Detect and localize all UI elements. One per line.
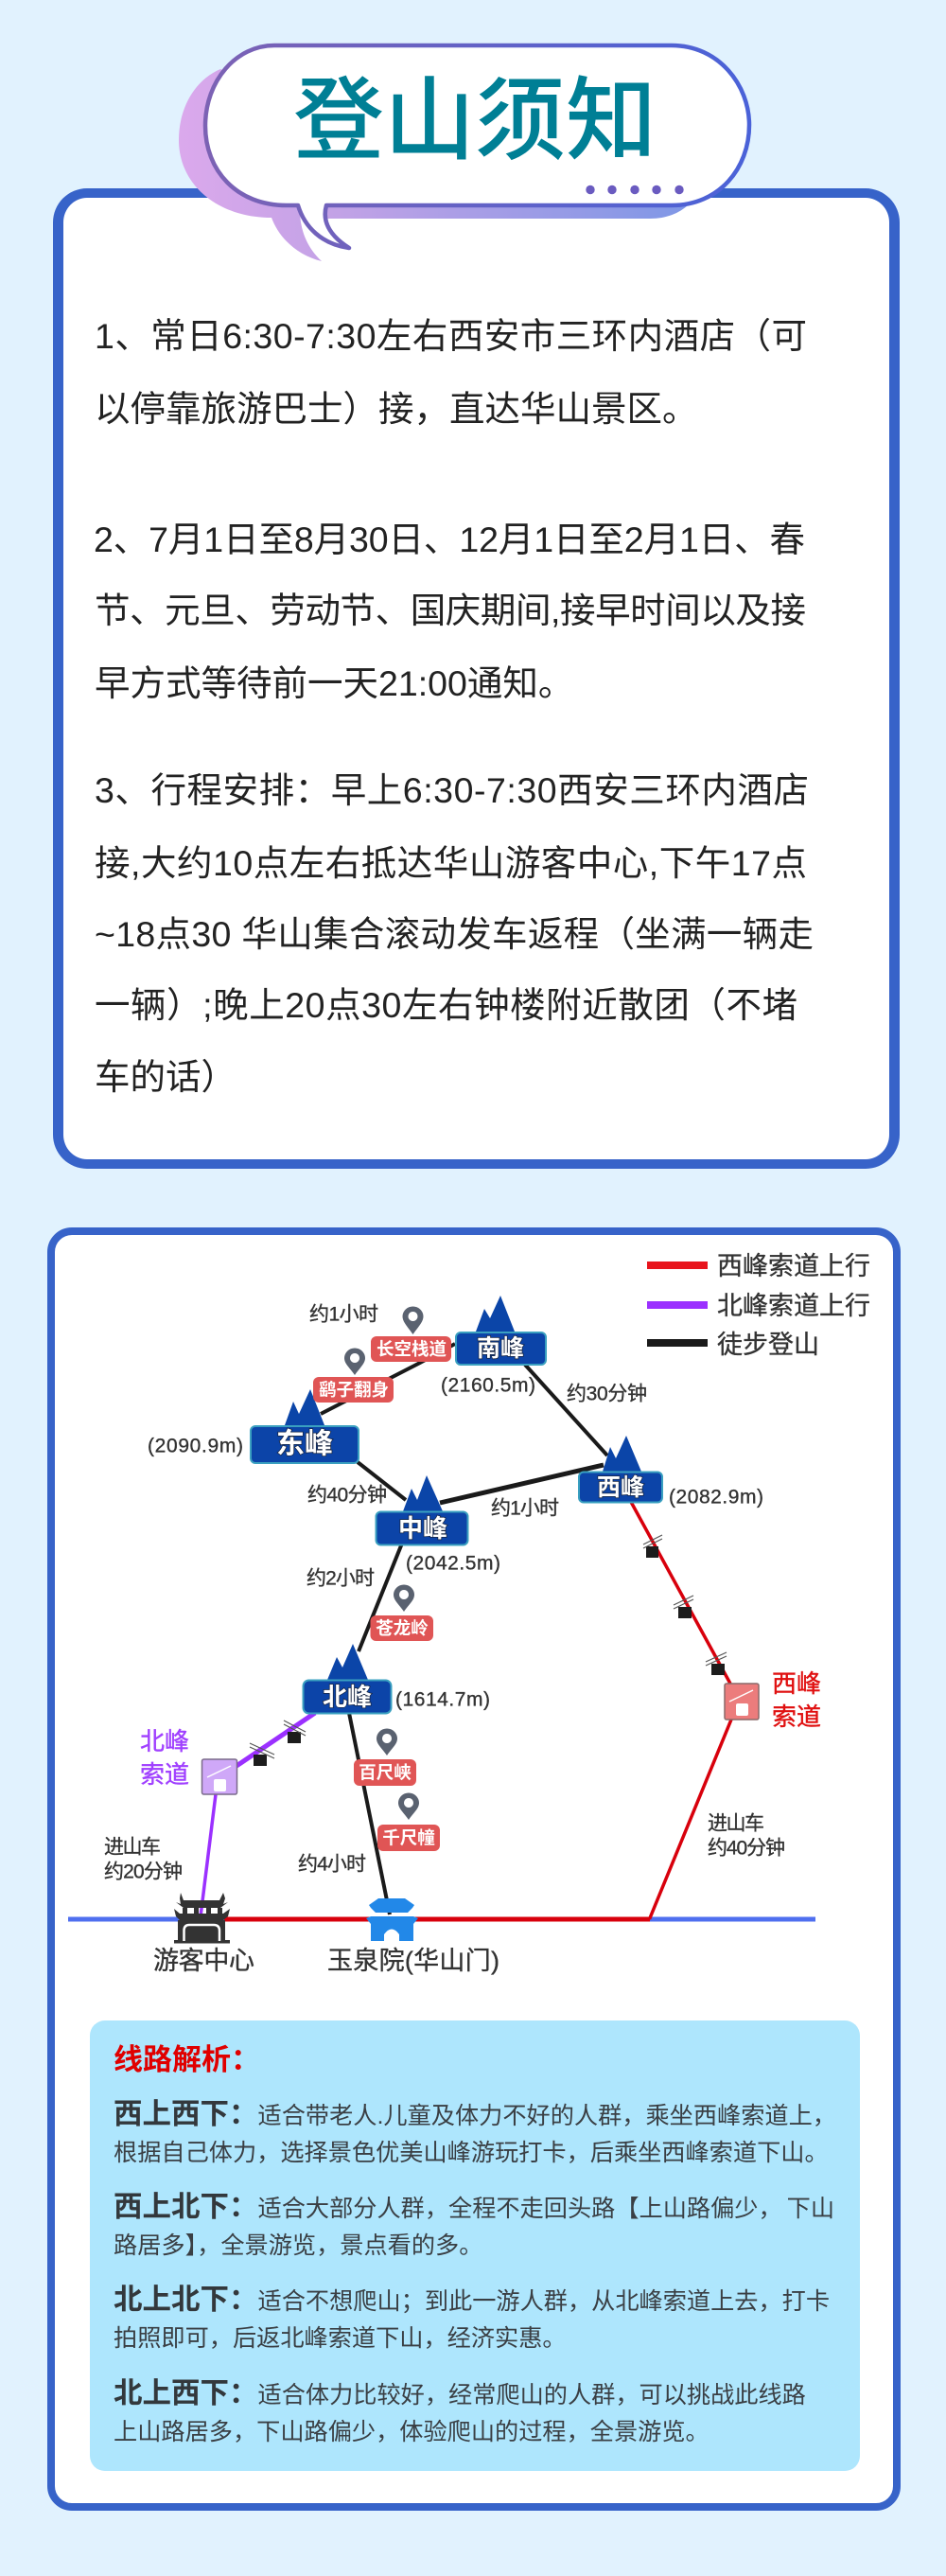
notes text: 2、7月1日至8月30日、12月1日至2月1日、春 — [94, 520, 805, 559]
panel: route analysis — [90, 2020, 860, 2471]
peak: 中峰: 中峰 — [398, 1514, 447, 1543]
labels: times and altitudes: 约20分钟 — [104, 1861, 183, 1883]
peak: 北峰: 北峰 — [323, 1683, 372, 1711]
legend: 西峰索道上行 — [717, 1252, 870, 1280]
route map diagram — [68, 1252, 870, 1975]
notes text: ~18点30 华山集合滚动发车返程（坐满一辆走 — [95, 914, 814, 954]
route analysis text: 路居多】，全景游览，景点看的多。 — [114, 2232, 482, 2259]
title speech bubble — [179, 44, 751, 261]
scenic spot tags: 长空栈道 — [377, 1339, 447, 1359]
base road line — [68, 1917, 815, 1921]
label: north cableway — [140, 1727, 189, 1789]
labels: times and altitudes: (2090.9m) — [148, 1435, 243, 1457]
peak: 东峰 — [251, 1389, 359, 1463]
labels: times and altitudes: 约40分钟 — [307, 1484, 387, 1507]
labels: times and altitudes: 约2小时 — [307, 1567, 375, 1590]
labels: times and altitudes: 约40分钟 — [708, 1838, 785, 1859]
scenic spot tags: 鹞子翻身 — [319, 1380, 389, 1400]
route analysis text: 根据自己体力，选择景色优美山峰游玩打卡，后乘坐西峰索道下山。 — [114, 2140, 829, 2166]
label: locations: 玉泉院(华山门) — [327, 1947, 499, 1975]
labels: times and altitudes: 约1小时 — [309, 1304, 378, 1325]
panel: notes — [53, 188, 900, 1169]
notes text: 车的话） — [95, 1057, 236, 1097]
route analysis text: 西上北下：适合大部分人群，全程不走回头路【上山路偏少，下山 — [114, 2191, 834, 2223]
route analysis text: 西上西下：适合带老人.儿童及体力不好的人群，乘坐西峰索道上， — [114, 2098, 836, 2130]
labels: times and altitudes: 约4小时 — [298, 1853, 366, 1876]
cable cars — [250, 1535, 727, 1766]
peak: 东峰: 东峰 — [276, 1429, 333, 1459]
label: north cableway: 索道 — [140, 1760, 189, 1789]
scenic spot tags: 百尺峡 — [359, 1762, 412, 1783]
peak: 西峰 — [579, 1436, 662, 1503]
cableway station: north — [202, 1759, 236, 1794]
labels: times and altitudes: (1614.7m) — [395, 1688, 490, 1711]
scenic spot tags: 千尺幢 — [382, 1828, 435, 1847]
route analysis text — [114, 2098, 836, 2445]
notes text: 1、常日6:30-7:30左右西安市三环内酒店（可 — [95, 316, 807, 356]
label: west cableway: 西峰 — [772, 1669, 821, 1698]
labels: times and altitudes: 进山车 — [104, 1836, 161, 1859]
route analysis heading: 线路解析： — [114, 2043, 260, 2076]
route analysis text: 拍照即可，后返北峰索道下山，经济实惠。 — [114, 2325, 567, 2352]
labels: times and altitudes: (2082.9m) — [669, 1486, 763, 1509]
notes text: 接,大约10点左右抵达华山游客中心,下午17点 — [95, 843, 807, 883]
legend: 徒步登山 — [717, 1331, 819, 1359]
notes text: 一辆）;晚上20点30左右钟楼附近散团（不堵 — [95, 985, 797, 1025]
route analysis text: 北上西下：适合体力比较好，经常爬山的人群，可以挑战此线路 — [114, 2377, 806, 2409]
labels: times and altitudes: 约1小时 — [491, 1497, 559, 1520]
legend: 北峰索道上行 — [717, 1292, 870, 1320]
map pins — [344, 1306, 424, 1820]
labels: times and altitudes — [104, 1304, 785, 1883]
peak: 中峰 — [377, 1475, 467, 1544]
notes text: 早方式等待前一天21:00通知。 — [95, 663, 573, 703]
labels: times and altitudes: (2160.5m) — [441, 1374, 535, 1397]
label: west cableway — [772, 1669, 821, 1731]
notes text: 3、行程安排：早上6:30-7:30西安三环内酒店 — [95, 770, 809, 810]
label: north cableway: 北峰 — [140, 1727, 189, 1756]
icon: Yuquan gate — [366, 1898, 418, 1941]
label: locations: 游客中心 — [153, 1947, 254, 1975]
route analysis text: 上山路居多，下山路偏少，体验爬山的过程，全景游览。 — [114, 2419, 710, 2445]
label: west cableway: 索道 — [772, 1703, 821, 1731]
peak: 西峰: 西峰 — [597, 1474, 644, 1501]
cableway station: west — [725, 1684, 759, 1720]
route analysis text: 北上北下：适合不想爬山；到此一游人群，从北峰索道上去，打卡 — [114, 2284, 830, 2316]
scenic spot tags — [313, 1336, 451, 1851]
label: locations — [153, 1947, 499, 1975]
north cableway route — [201, 1713, 315, 1916]
peak: 南峰 — [456, 1296, 546, 1365]
labels: times and altitudes: (2042.5m) — [406, 1552, 500, 1575]
notes text: 节、元旦、劳动节、国庆期间,接早时间以及接 — [95, 591, 806, 630]
labels: times and altitudes: 进山车 — [708, 1813, 764, 1834]
peak: 北峰 — [303, 1644, 392, 1713]
labels: times and altitudes: 约30分钟 — [567, 1384, 647, 1404]
icon: visitor center gate — [174, 1893, 230, 1944]
peak: 南峰: 南峰 — [477, 1335, 524, 1362]
notes text: 以停靠旅游巴士）接，直达华山景区。 — [95, 389, 698, 429]
hiking trails — [321, 1344, 607, 1914]
decorative dots — [586, 185, 684, 194]
scenic spot tags: 苍龙岭 — [376, 1618, 429, 1638]
west cableway route — [631, 1502, 731, 1919]
title: 登山须知 — [293, 70, 657, 172]
notes text — [94, 316, 814, 1097]
legend — [647, 1252, 870, 1359]
panel: route map — [47, 1227, 901, 2511]
